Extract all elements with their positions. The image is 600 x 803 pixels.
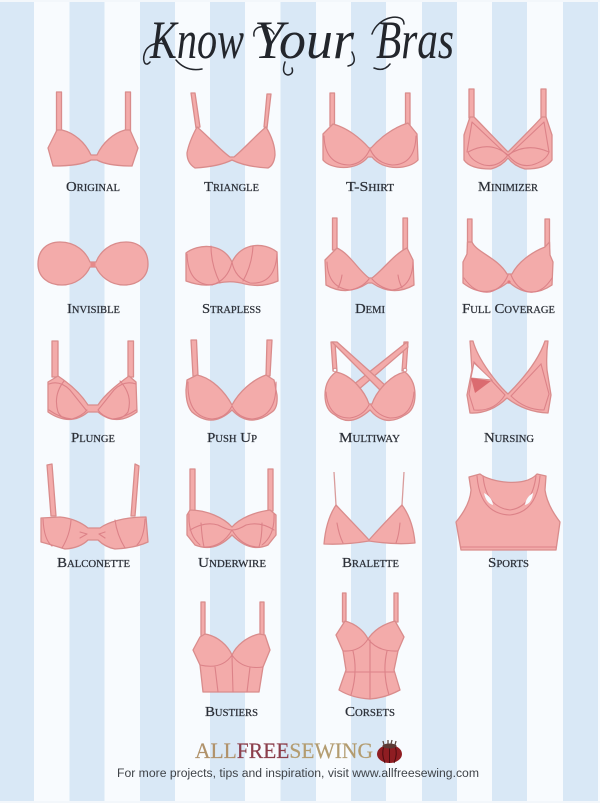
footer text: For more projects, tips and inspiration, visit www.allfreesewing.com [117, 768, 479, 780]
bra: sports [456, 474, 560, 550]
label: nursing: Nursing [484, 431, 534, 446]
bra: invisible [38, 242, 148, 285]
title: Know [149, 10, 244, 70]
bra: underwire [187, 469, 276, 547]
icon: pincushion [377, 740, 402, 763]
bra: full coverage [463, 219, 553, 292]
bra: triangle [187, 93, 275, 168]
label: strapless: Strapless [202, 302, 261, 317]
bra: balconette [41, 464, 148, 549]
title: Your [254, 10, 355, 70]
title: Bras [376, 10, 454, 70]
label: minimizer: Minimizer [478, 180, 538, 195]
logo: allfreesewing: ALLFREESEWING [195, 738, 373, 763]
bra: demi [325, 218, 414, 291]
title [144, 10, 454, 75]
nursing flap [471, 378, 491, 393]
bra: bralette [324, 472, 415, 544]
label: sports: Sports [488, 556, 529, 571]
bra: minimizer [464, 89, 552, 169]
bra: strapless [186, 245, 278, 285]
label: triangle: Triangle [204, 180, 259, 195]
bra: multiway [325, 342, 415, 420]
bra: original [48, 92, 138, 166]
label: plunge: Plunge [71, 431, 115, 446]
bra: corsets [336, 593, 404, 699]
label: push up: Push Up [207, 431, 257, 446]
bra: bustiers [193, 602, 270, 692]
nursing window [471, 363, 492, 380]
label: t-shirt: T-Shirt [346, 180, 394, 195]
label: underwire: Underwire [198, 556, 266, 571]
bra: nursing [467, 341, 551, 413]
label: original: Original [66, 180, 120, 195]
bra: push up [186, 340, 277, 420]
label: corsets: Corsets [345, 705, 395, 720]
sports cut-outs [484, 493, 493, 505]
label: balconette: Balconette [57, 556, 130, 571]
label: multiway: Multiway [339, 431, 400, 446]
bra: t-shirt [323, 93, 418, 168]
bra: plunge [48, 341, 137, 420]
label: demi: Demi [355, 302, 385, 317]
label: bustiers: Bustiers [205, 705, 258, 720]
label: full coverage: Full Coverage [462, 302, 555, 317]
label: bralette: Bralette [342, 556, 399, 571]
label: invisible: Invisible [67, 302, 120, 317]
